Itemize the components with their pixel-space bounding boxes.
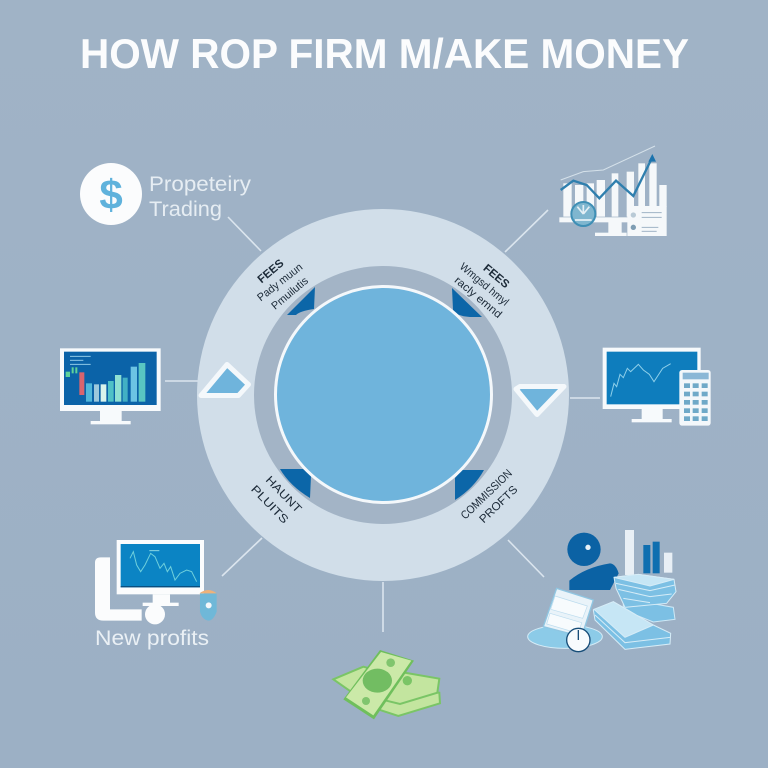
ring label: top right: Wmgsd hmyl bbox=[457, 261, 511, 309]
label: proprietary trading: Propeteiry bbox=[149, 172, 251, 196]
left diamond marker bbox=[201, 364, 248, 396]
ring label: bottom right: PROFTS bbox=[477, 484, 521, 526]
icon: desk with monitor bbox=[95, 540, 217, 624]
outer ring bbox=[197, 209, 569, 581]
ring label: bottom left: HAUNT bbox=[263, 474, 303, 516]
title: HOW ROP FIRM M/AKE MONEY bbox=[80, 30, 689, 77]
middle money stack bbox=[623, 598, 675, 622]
blue triangle marker: top right bbox=[452, 288, 482, 317]
icon: dollar coin: $ bbox=[99, 171, 123, 218]
ring label: bottom left: PLUITS bbox=[248, 483, 290, 527]
inner ring bbox=[254, 266, 512, 524]
icon: green banknotes bbox=[333, 650, 440, 719]
ring label: top left: FEES bbox=[256, 257, 287, 286]
icon: monitor with line chart and calculator bbox=[603, 348, 711, 426]
label: new profits: New profits bbox=[95, 627, 209, 650]
right diamond marker bbox=[516, 386, 564, 414]
central circle bbox=[276, 286, 492, 502]
bottom money stack bbox=[593, 602, 671, 649]
ring label: top right: FEES bbox=[481, 262, 512, 291]
ring label: top left: Pmuilutis bbox=[269, 275, 311, 312]
label: proprietary trading bbox=[149, 172, 251, 221]
icon: analytics chart with document bbox=[559, 146, 667, 236]
central ring diagram bbox=[197, 209, 569, 581]
ring label: bottom left bbox=[248, 474, 303, 527]
disc tray bbox=[528, 625, 602, 648]
icon: dollar coin bbox=[80, 163, 142, 225]
ring label: top left: Pady muun bbox=[255, 261, 305, 304]
icon: person with money stacks bbox=[528, 530, 676, 652]
top money stack bbox=[614, 574, 676, 607]
ring label: bottom right: COMMISSION bbox=[459, 468, 515, 522]
label: proprietary trading: Trading bbox=[149, 197, 222, 221]
blue triangle marker: bottom left bbox=[280, 469, 311, 498]
blue triangle marker: bottom right bbox=[455, 470, 484, 500]
blue triangle marker: top left bbox=[287, 287, 315, 315]
ring label: top right: racly emnd bbox=[452, 274, 504, 321]
icon: monitor with bar chart bbox=[60, 348, 161, 424]
